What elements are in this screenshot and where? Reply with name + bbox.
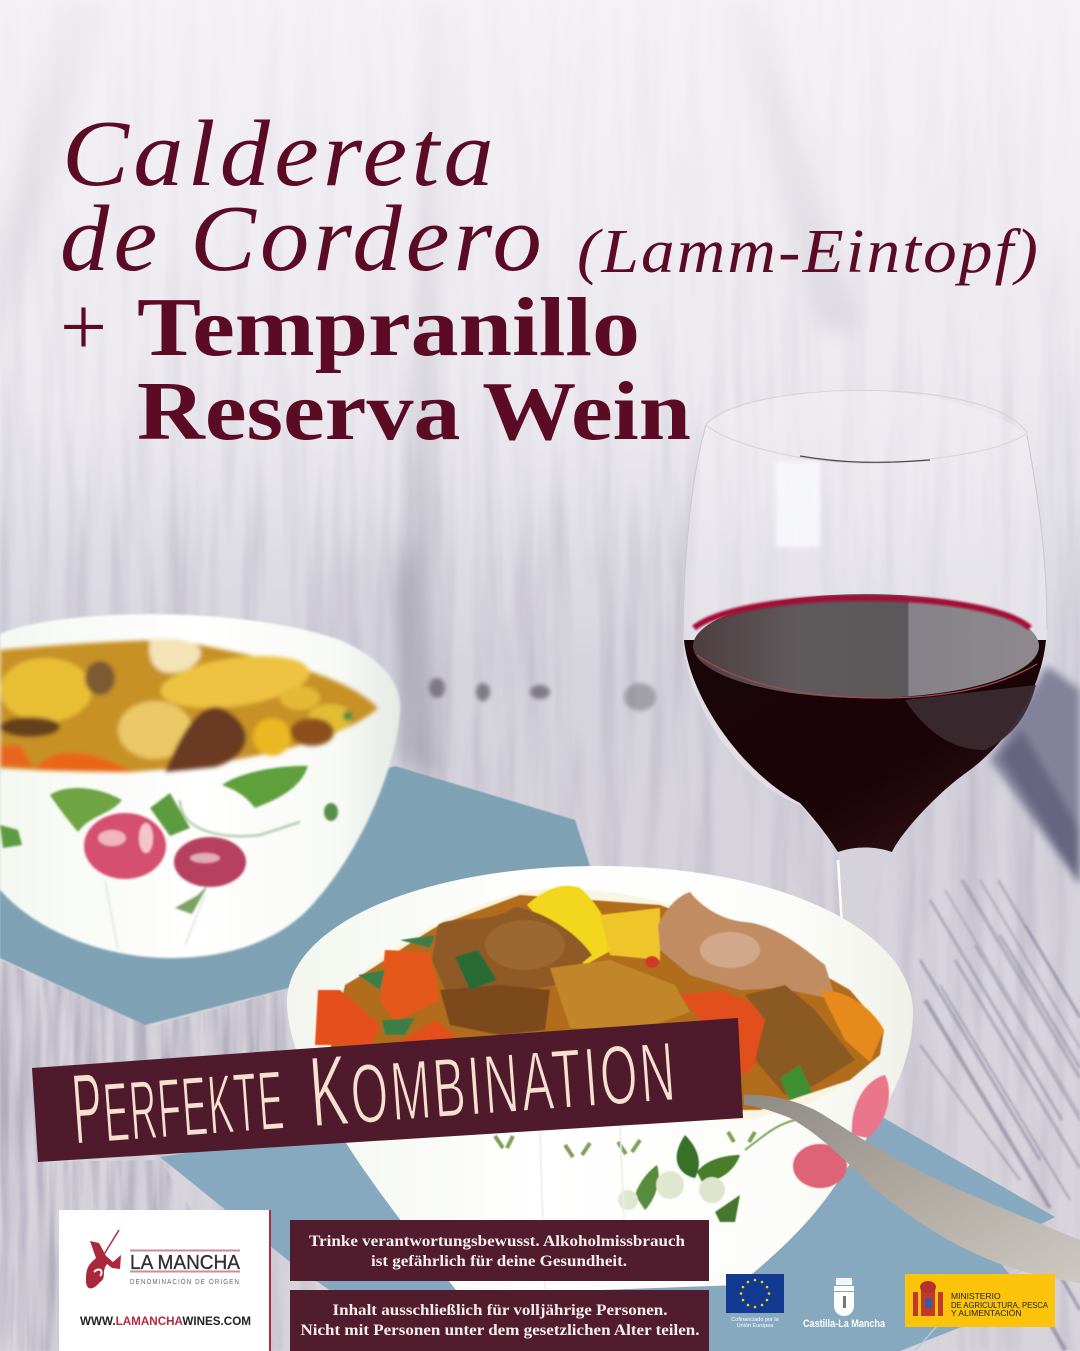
logo: European Union [726,1274,784,1329]
glass stem [837,848,892,930]
logo wordmark: DENOMINACIÓN DE ORIGEN [130,1277,240,1286]
wine glass [683,390,1047,930]
notice: legal age: Nicht mit Personen unter dem gesetzlichen Alter teilen. [300,1322,700,1339]
website url: WWW.LAMANCHAWINES.COM [80,1316,251,1328]
glass rim [706,390,1027,463]
notice: legal age: Inhalt ausschließlich für volljährige Personen. [332,1302,668,1319]
logo: Castilla-La Mancha: Castilla-La Mancha [803,1318,886,1330]
stew in rear bowl [0,639,378,772]
logo: Spanish ministry [905,1274,1055,1327]
wine highlights [905,685,1036,750]
notice: responsible drinking: ist gefährlich für deine Gesundheit. [371,1253,627,1270]
title translation: (Lamm-Eintopf) [577,218,1040,286]
logo: European Union: Unión Europea [737,1323,774,1329]
wine surface [693,594,1039,698]
logo panel: La Mancha [59,1210,271,1351]
wine body [684,640,1046,852]
logo icon: knight on horse [86,1230,121,1288]
napkin: front blue cloth [160,1090,1055,1351]
logo wordmark [130,1250,241,1286]
title line: de Cordero: de Cordero [60,187,546,291]
notice: legal age [290,1290,709,1351]
logo: Castilla-La Mancha [803,1278,886,1330]
title plus sign: + [60,281,107,374]
rear bowl with stew [0,614,400,958]
stew in front bowl [315,886,884,1110]
title line: Reserva Wein: Reserva Wein [137,365,691,458]
glass bowl [683,390,1047,850]
napkin: rear blue cloth [0,766,590,1025]
title line: Caldereta: Caldereta [62,102,498,206]
logo: Spanish ministry: DE AGRICULTURA, PESCA [951,1300,1048,1310]
logo wordmark: LA MANCHA [130,1252,241,1274]
rear bowl floral pattern [0,766,338,950]
ribbon: perfekte kombination [32,1010,743,1166]
logo: Spanish ministry: MINISTERIO [951,1291,1001,1301]
title [60,102,1040,458]
spoon [744,1095,1080,1283]
notice: responsible drinking [290,1220,709,1281]
front bowl with stew [287,866,913,1295]
title line: Tempranillo: Tempranillo [137,281,640,374]
logo: European Union: Cofinanciado por la [731,1317,780,1323]
ribbon text: KOMBINATION [306,1010,681,1149]
ribbon text [68,1010,681,1166]
notice: responsible drinking: Trinke verantwortungsbewusst. Alkoholmissbrauch [309,1233,685,1250]
front bowl floral pattern [495,1075,889,1290]
logo: Spanish ministry: Y ALIMENTACIÓN [951,1308,1022,1318]
ribbon text: PERFEKTE [68,1039,288,1166]
